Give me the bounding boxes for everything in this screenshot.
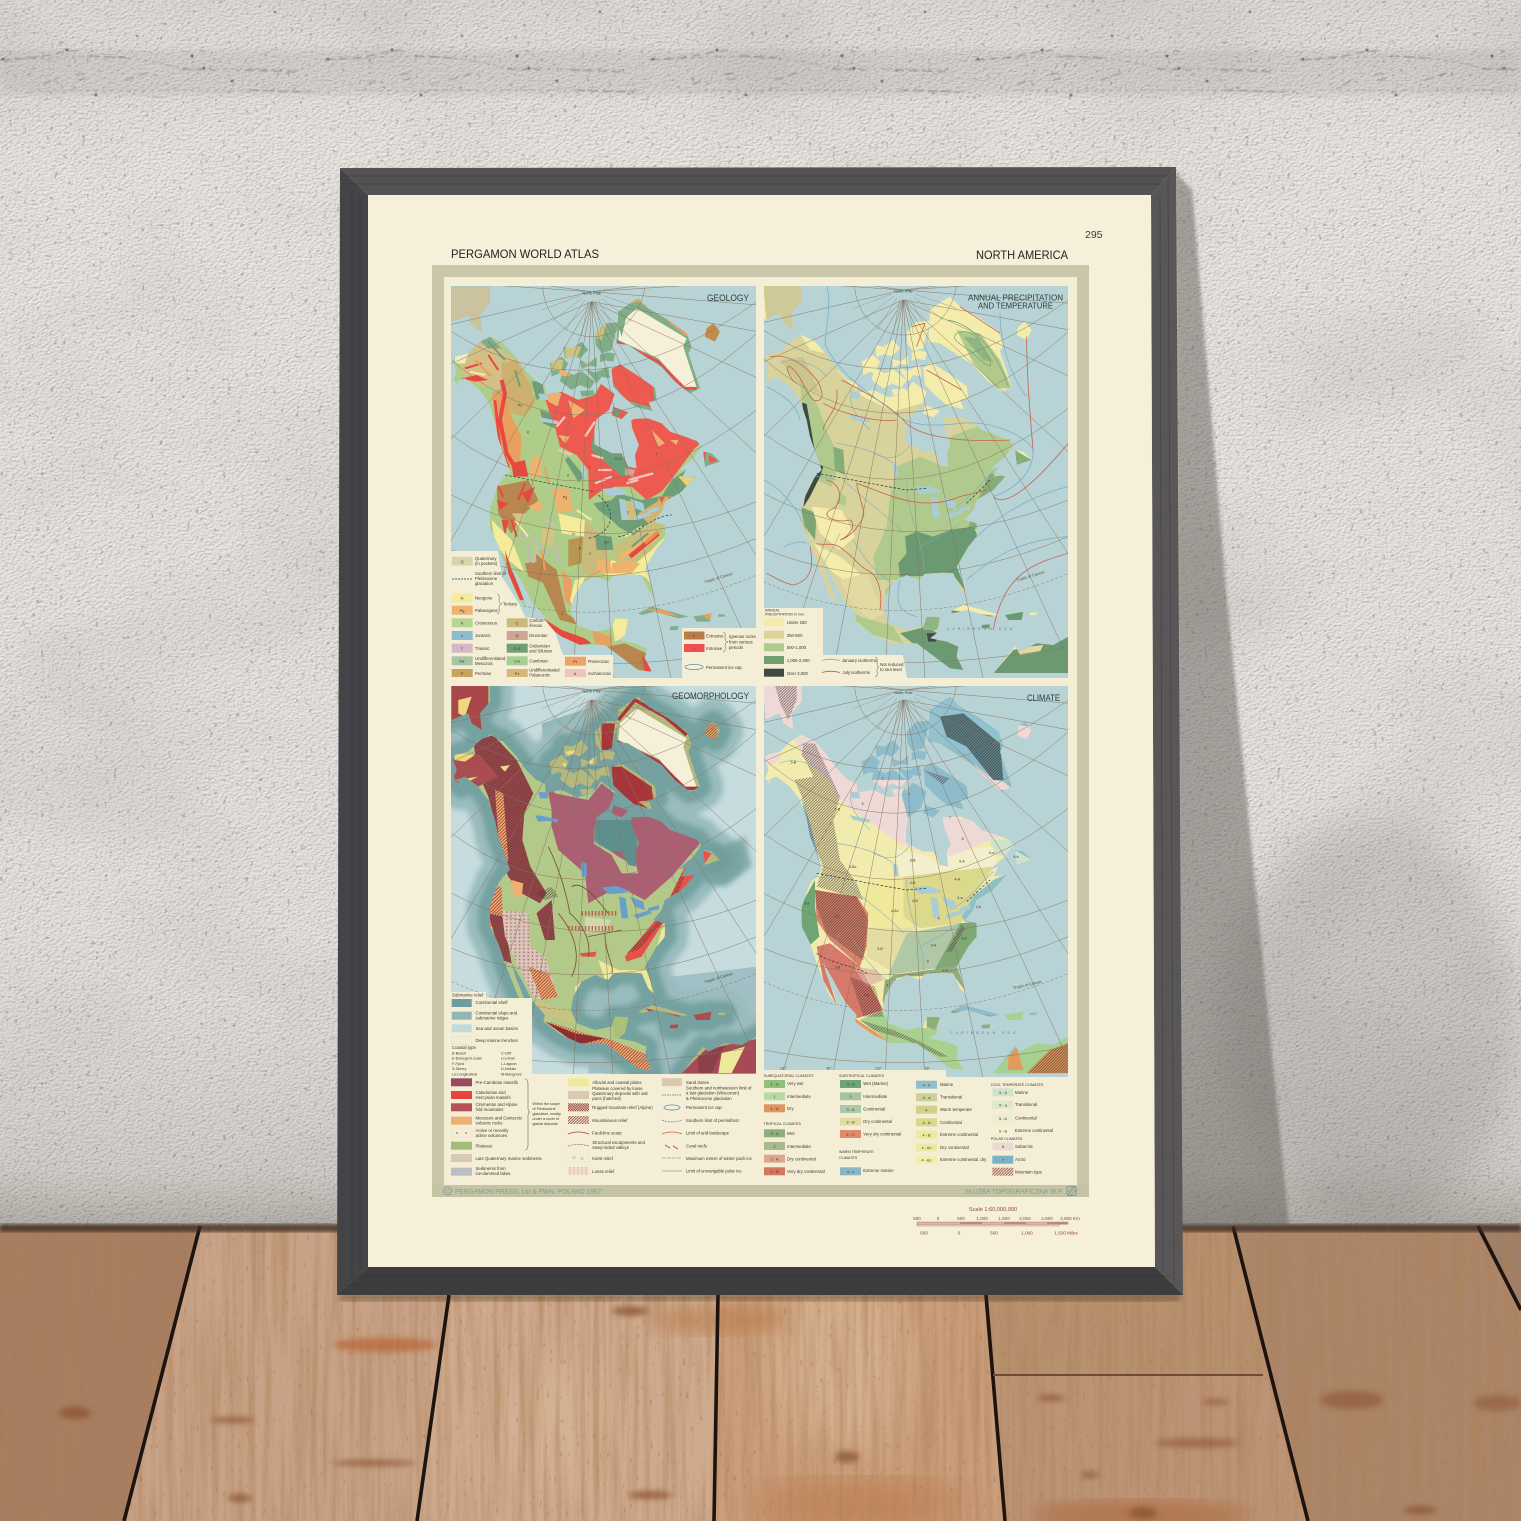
legend: precipitation: PRECIPITATION in mm. xyxy=(765,612,805,616)
legend: climate: Extreme continental, dry xyxy=(940,1157,987,1162)
map labels: Pg xyxy=(563,495,567,499)
scale bar: 2,500 xyxy=(1041,1216,1053,1221)
climate map labels: 2-A xyxy=(864,993,870,997)
scale bar: 2,000 xyxy=(1019,1216,1031,1221)
legend: geology: Undifferentiated xyxy=(475,656,506,661)
legend: geomorphology: Quaternary deposits with salt xyxy=(592,1091,649,1096)
climate map labels: 7 xyxy=(882,776,884,780)
climate map labels: 5-B xyxy=(790,760,797,764)
panel: geomorphology map xyxy=(448,683,760,1080)
legend: geomorphology: Southern limit of permafrost xyxy=(686,1118,740,1123)
legend: geomorphology: under a cover of xyxy=(532,1117,560,1121)
climate map labels: 7 xyxy=(949,816,951,820)
legend: geology: Southern limit of xyxy=(475,571,507,576)
legend: climate xyxy=(764,1070,1068,1185)
legend: geomorphology: glacial deposits xyxy=(532,1122,558,1126)
panel: geomorphology map: North Pole xyxy=(582,689,602,694)
legend: geomorphology: Continental slope and xyxy=(476,1010,518,1016)
legend: geomorphology: Cimmerian and Alpine xyxy=(476,1102,518,1107)
legend: climate: 3 - B xyxy=(846,1120,855,1124)
heading: atlas title: PERGAMON WORLD ATLAS xyxy=(451,247,599,261)
legend: climate: Continental xyxy=(1015,1116,1037,1120)
legend: geomorphology: submarine ridges xyxy=(476,1016,508,1020)
legend: geomorphology: Hercynian massifs xyxy=(476,1095,511,1100)
isotherm lines xyxy=(763,285,1068,630)
legend: climate: SUBTROPICAL CLIMATES xyxy=(839,1074,885,1078)
legend: geology: Undifferentiated xyxy=(529,668,560,672)
legend: geology: Permian xyxy=(475,671,492,676)
legend: geology: Quaternary xyxy=(475,556,497,561)
map labels: P xyxy=(579,547,582,551)
climate map labels: North Pole xyxy=(894,690,914,695)
panel: climate map: 120° xyxy=(780,1066,788,1070)
heading: annual precipitation and temperature: ANNUAL PRECIPITATION xyxy=(968,294,1063,302)
climate map labels xyxy=(790,690,1019,997)
legend: precipitation: to sea level xyxy=(880,667,902,672)
legend: geology: P xyxy=(461,671,464,676)
legend: climate: 3 - A xyxy=(846,1107,855,1112)
legend: geology: I xyxy=(693,646,695,651)
legend: geology: Permanent ice cap xyxy=(706,665,742,670)
legend: geomorphology: Alluvial and coastal plains xyxy=(592,1080,642,1085)
scale bar: 1,000 xyxy=(1021,1230,1033,1236)
legend: climate: Continental xyxy=(940,1120,962,1125)
legend: geology: Jurassic xyxy=(475,633,492,638)
map labels xyxy=(518,290,657,616)
heading: annual precipitation and temperature: AND TEMPERATURE xyxy=(978,302,1053,310)
scale bar: 0 xyxy=(958,1230,961,1236)
heading: geology: GEOLOGY xyxy=(707,293,749,303)
climate map labels: 3-a xyxy=(804,902,810,906)
legend: climate: 5 - A xyxy=(999,1116,1007,1121)
legend: climate: 1 - a xyxy=(771,1082,779,1086)
legend: geomorphology: Lo-Longitudinal xyxy=(452,1072,477,1076)
legend: climate: Dry continental xyxy=(940,1145,969,1150)
legend: climate: Extreme continental xyxy=(940,1132,978,1137)
picture frame xyxy=(337,167,1183,1295)
legend: geology: glaciation xyxy=(475,581,494,586)
panel: annual precipitation and temperature map xyxy=(760,283,1070,680)
legend: geomorphology: volcanic rocks xyxy=(476,1120,502,1126)
legend: geology: Carbon- xyxy=(529,618,545,623)
climate map labels: 4-B xyxy=(910,881,916,885)
legend: geomorphology: & Pleistocene glaciation xyxy=(686,1096,732,1101)
legend: climate: 4 - b xyxy=(923,1082,930,1088)
heading: annual precipitation and temperature xyxy=(968,294,1063,310)
legend: geology: T xyxy=(461,646,464,651)
legend: geomorphology: Plateaus xyxy=(476,1144,492,1148)
legend: climate: COOL TEMPERATE CLIMATES xyxy=(991,1083,1044,1087)
legend: geomorphology: D-Deltaic xyxy=(501,1067,516,1071)
scale bar: 500 xyxy=(920,1230,928,1236)
climate map labels: 4-b xyxy=(976,905,981,909)
legend: climate: 5 - B xyxy=(999,1128,1008,1134)
legend: geomorphology: pans (hatched) xyxy=(592,1096,622,1101)
legend: geomorphology: Mesozoic and Cainozoic xyxy=(476,1116,523,1120)
legend: geomorphology: L-Lagoon xyxy=(501,1062,517,1066)
heading: climate: CLIMATE xyxy=(1027,693,1060,703)
climate map labels: 2-B xyxy=(834,966,841,970)
legend: geomorphology: E-Emergent coast xyxy=(452,1056,482,1060)
scale bar: 1,500 Miles xyxy=(1054,1230,1078,1236)
legend: climate: 4 - Bc xyxy=(921,1158,932,1162)
legend: geomorphology: Active or recently xyxy=(476,1128,509,1133)
legend: geomorphology: Limit of unnavigable polar ice xyxy=(686,1168,742,1174)
legend: geology: Cretaceous xyxy=(475,620,497,626)
heading: region title: NORTH AMERICA xyxy=(976,248,1068,262)
panel: climate map: CARIBBEAN SEA xyxy=(950,1031,1018,1035)
legend: geomorphology: F-Fjord xyxy=(452,1062,464,1066)
frame shadow on wall xyxy=(1175,172,1289,1226)
legend: climate: Warm temperate xyxy=(940,1107,972,1112)
climate map labels: 4-a xyxy=(957,896,964,900)
map labels: K xyxy=(567,474,570,478)
legend: geomorphology: Maximum extent of winter pack ice xyxy=(686,1156,753,1161)
map labels: O-S xyxy=(615,457,622,461)
legend: climate: 3 xyxy=(849,1094,852,1099)
legend: geology: Igneous rocks xyxy=(729,634,756,639)
legend: climate: 7 xyxy=(1002,1158,1004,1162)
legend: geomorphology: glaciation, mostly xyxy=(532,1112,561,1116)
legend: climate: 2 - a xyxy=(771,1131,779,1136)
legend: geology xyxy=(451,551,756,678)
legend: geomorphology: Coastal type xyxy=(452,1045,476,1050)
legend: geomorphology: Coral reefs xyxy=(686,1144,707,1148)
heading: geomorphology: GEOMORPHOLOGY xyxy=(672,691,749,701)
legend: geomorphology: Rugged mountain relief (Alpine) xyxy=(592,1105,653,1110)
wooden floor xyxy=(0,1224,1521,1521)
legend: geomorphology: Karst relief xyxy=(592,1156,614,1161)
legend: climate: SUBEQUATORIAL CLIMATES xyxy=(764,1074,814,1078)
legend: geomorphology: B-Beach xyxy=(452,1052,466,1056)
legend: geology: Extrusive xyxy=(706,634,724,638)
scale bar: 500 xyxy=(957,1216,965,1221)
legend: climate: Very dry continental xyxy=(787,1169,825,1174)
legend: geology: Mesozoic xyxy=(475,661,494,666)
legend: geomorphology: Caledonian and xyxy=(476,1090,506,1095)
legend: climate: 4 - A xyxy=(922,1120,931,1125)
panel: annual precipitation and temperature map: CARIBBEAN SEA xyxy=(947,627,1015,631)
legend: climate: 3 - C xyxy=(846,1132,855,1137)
legend: geomorphology: S-Skerry xyxy=(452,1067,466,1071)
panel: climate map: 100° xyxy=(875,1066,883,1070)
legend: climate: 4 - a xyxy=(923,1095,931,1100)
map labels: Pz xyxy=(518,404,522,408)
legend: geomorphology: Submarine relief xyxy=(452,992,484,998)
legend: geomorphology: Late Quaternary marine sediments xyxy=(476,1156,542,1161)
climate map labels: 4-A xyxy=(954,878,961,882)
legend: climate: Transitional xyxy=(1015,1102,1037,1107)
panel: geology map xyxy=(448,285,758,682)
scale bar: 500 xyxy=(913,1216,921,1221)
map labels: North Pole xyxy=(582,290,602,295)
climate map labels: 5-A xyxy=(959,860,965,864)
climate map labels: 4 xyxy=(938,916,940,920)
legend: climate: Arctic xyxy=(1015,1157,1027,1162)
legend: geology: Pg xyxy=(460,608,464,613)
legend: climate: Extreme continental xyxy=(1015,1128,1053,1133)
page number: 295 xyxy=(1085,229,1103,241)
cartographer credit with icon: SŁUŻBA TOPOGRAFICZNA W.P. xyxy=(965,1186,1063,1196)
legend: geology: O-S xyxy=(514,646,521,651)
legend: geology: K xyxy=(461,620,464,626)
legend: geomorphology: M-Mangrove xyxy=(501,1072,522,1076)
panel: geomorphology map: Tropic of Cancer xyxy=(704,971,734,984)
legend: geology: A xyxy=(574,671,577,676)
legend: climate: Extreme marine xyxy=(863,1168,894,1173)
map labels: C xyxy=(627,510,630,514)
legend: geology: Cambrian xyxy=(529,658,549,664)
climate map labels: 5-B xyxy=(834,808,841,812)
map labels: Cm xyxy=(604,540,609,544)
panel: climate map: Tropic of Cancer xyxy=(1012,979,1043,990)
legend: geomorphology: Li-Liman xyxy=(501,1056,515,1060)
legend: geomorphology: Deep marine trenches xyxy=(476,1038,518,1043)
legend: geology: Pleistocene xyxy=(475,576,498,581)
legend: geomorphology: Mountainous relief xyxy=(592,1118,628,1123)
legend: climate: 2 - A xyxy=(770,1156,779,1162)
scale bar: Scale 1:60,000,000 xyxy=(969,1207,1017,1213)
legend: climate: 2 - B xyxy=(770,1169,779,1174)
legend: climate: CLIMATES xyxy=(839,1156,858,1160)
legend: precipitation: ANNUAL xyxy=(765,608,780,612)
legend: geomorphology: ice-dammed lakes xyxy=(476,1171,510,1176)
climate map labels: 3-a xyxy=(961,936,968,940)
legend: precipitation: 500-1,000 xyxy=(787,645,807,650)
scale bar: 500 xyxy=(990,1230,998,1236)
climate map labels: 3-C xyxy=(834,914,841,918)
legend: climate: Marine xyxy=(940,1082,954,1087)
legend: geomorphology: Permanent ice cap xyxy=(686,1105,722,1110)
legend: geomorphology: Southern and northwestern limit of xyxy=(686,1086,752,1090)
legend: climate: 4 xyxy=(925,1108,928,1112)
panel: climate map xyxy=(760,683,1070,1080)
legend: climate: 6 xyxy=(1002,1144,1004,1149)
scale bar: 1,000 xyxy=(976,1216,988,1221)
climate map labels: 6 xyxy=(862,802,864,806)
scale bar: 0 xyxy=(937,1216,940,1221)
legend: precipitation: July isotherms xyxy=(842,670,870,675)
map labels: J xyxy=(561,612,563,616)
legend: precipitation: January isotherms xyxy=(842,658,877,663)
climate map labels: 4-Bc xyxy=(849,865,857,869)
legend: climate: 5 - b xyxy=(999,1090,1007,1095)
panel: geology map: Tropic of Cancer xyxy=(704,571,734,584)
legend: geomorphology: Sea and ocean basins xyxy=(476,1026,518,1031)
climate map labels: 2 xyxy=(886,984,888,988)
legend: climate: Very wet xyxy=(787,1081,804,1086)
legend: geomorphology: Fault-line scarp xyxy=(592,1130,622,1136)
climate map labels: 6 xyxy=(962,837,964,841)
legend: geology: Y xyxy=(693,634,696,638)
legend: climate: Continental xyxy=(863,1106,885,1112)
legend: geology: Palaeozoic xyxy=(529,672,551,678)
climate map labels: 2-a xyxy=(943,968,949,972)
legend: precipitation: Under 250 xyxy=(787,620,807,625)
legend: geology: Mz xyxy=(459,658,465,664)
panel: climate map: 80° xyxy=(827,1066,832,1070)
scale bar: 1,500 xyxy=(998,1216,1010,1221)
floor knots xyxy=(59,1306,1521,1519)
legend: climate: TROPICAL CLIMATES xyxy=(764,1122,802,1126)
publisher credit: PERGAMON PRESS, Ltd & PWN, POLAND 1967 xyxy=(455,1188,602,1196)
panel: annual precipitation and temperature map: Tropic of Cancer xyxy=(1015,569,1046,583)
legend: geology: Palaeogene xyxy=(475,608,499,613)
legend: geology: Neogene xyxy=(475,596,493,600)
legend: geomorphology: Sediments from xyxy=(476,1166,506,1171)
legend: climate: Dry continental xyxy=(863,1119,892,1124)
legend: climate: 4 - c xyxy=(847,1169,854,1174)
map labels: I xyxy=(656,452,657,456)
panel: climate map: 90° xyxy=(925,1066,931,1070)
legend: geomorphology: Pre-Cambrian massifs xyxy=(476,1080,518,1085)
legend: climate: 4 - B xyxy=(922,1132,931,1138)
legend: climate: Marine xyxy=(1015,1090,1029,1095)
legend: geology: J xyxy=(461,633,463,638)
legend: geology: Devonian xyxy=(529,633,548,638)
legend: geomorphology: Limit of arid landscape xyxy=(686,1130,730,1136)
climate map labels: 5-a xyxy=(989,851,995,855)
legend: geomorphology: a last glaciation (Wisconsin) xyxy=(686,1090,740,1096)
legend: geology: Q xyxy=(460,559,464,564)
legend: climate: 5 - a xyxy=(999,1102,1008,1108)
cartographer credit with icon xyxy=(965,1186,1076,1196)
legend: geomorphology: Plateaus covered by loose xyxy=(592,1086,643,1091)
legend: precipitation xyxy=(764,608,907,678)
legend: geology: Cm xyxy=(514,658,520,664)
legend: climate: POLAR CLIMATES xyxy=(991,1137,1023,1141)
legend: geology: Triassic xyxy=(475,646,490,651)
legend: geomorphology: C-Cliff xyxy=(501,1052,512,1056)
climate map labels: 5-B xyxy=(910,859,916,863)
legend: climate: 3 - a xyxy=(847,1082,855,1086)
legend: geology: Archaeozoic xyxy=(588,671,612,676)
legend: climate: Dry continental xyxy=(787,1156,816,1162)
legend: geomorphology: Structural escarpments and xyxy=(592,1140,645,1145)
legend: geomorphology: Within the scope xyxy=(532,1102,560,1106)
legend: geomorphology xyxy=(451,992,756,1185)
legend: geology: Pz xyxy=(515,671,519,676)
legend: geology: Pt xyxy=(573,659,578,664)
legend: precipitation: Over 2,000 xyxy=(787,671,809,676)
legend: geology: iferous xyxy=(529,623,542,628)
legend: geomorphology: steep-sided valleys xyxy=(592,1145,629,1150)
panel: annual precipitation and temperature map: North Pole xyxy=(894,289,914,294)
legend: geology: and Silurian xyxy=(529,648,553,654)
legend: climate: Dry xyxy=(787,1106,795,1111)
legend: climate: Subarctic xyxy=(1015,1144,1034,1149)
legend: geology: C xyxy=(516,620,519,626)
legend: climate: Intermediate xyxy=(787,1144,811,1149)
legend: geology: Intrusive xyxy=(706,646,723,651)
legend: precipitation: Not reduced xyxy=(880,662,904,667)
legend: climate: Mountain type xyxy=(1015,1170,1043,1174)
climate map labels: 3 xyxy=(927,960,929,964)
legend: climate: 2 xyxy=(773,1144,776,1149)
legend: geomorphology: active volcanoes xyxy=(476,1133,507,1138)
legend: climate: WARM TEMPERATE xyxy=(839,1150,874,1154)
legend: geology: Tertiary xyxy=(503,602,518,606)
legend: geology: Ordovician xyxy=(529,644,550,648)
legend: geology: periods xyxy=(729,645,743,650)
atlas sheet border xyxy=(432,265,1089,1197)
legend: precipitation: 250-500 xyxy=(787,633,803,638)
scale bar: 3,000 Km xyxy=(1060,1216,1080,1221)
climate map labels: 3-B xyxy=(877,947,883,951)
map labels: C xyxy=(589,552,592,556)
climate map labels: 4-Ac xyxy=(891,909,899,913)
climate map labels: 4-B xyxy=(912,899,918,903)
legend: geomorphology: Continental shelf xyxy=(476,1000,508,1005)
legend: geology: (in pockets) xyxy=(475,561,498,566)
legend: geology: Proterozoic xyxy=(588,659,610,664)
legend: precipitation: 1,000-2,000 xyxy=(787,658,810,663)
legend: climate: Transitional xyxy=(940,1094,962,1100)
poster paper xyxy=(368,195,1155,1267)
legend: climate: Very dry continental xyxy=(863,1132,901,1136)
legend: climate: Intermediate xyxy=(787,1094,811,1099)
publisher credit: C xyxy=(446,1189,450,1195)
climate map labels: 3-A xyxy=(930,944,937,948)
legend: geomorphology: of Pleistocene xyxy=(532,1107,556,1111)
climate map labels: 5-b xyxy=(1013,855,1019,859)
map labels: N xyxy=(572,532,575,536)
scale bar xyxy=(913,1207,1080,1236)
legend: climate: Wet (Marine) xyxy=(863,1081,889,1086)
legend: geomorphology: fold mountains xyxy=(476,1107,503,1112)
legend: geology: N xyxy=(461,596,464,600)
map labels: K xyxy=(527,430,530,434)
legend: geomorphology: Loess relief xyxy=(592,1169,615,1174)
legend: climate: Wet xyxy=(787,1131,795,1136)
legend: climate: 1 xyxy=(773,1094,776,1099)
legend: geology: from various xyxy=(729,640,753,644)
legend: geomorphology: Sand dunes xyxy=(686,1080,709,1085)
map labels: I xyxy=(589,465,590,469)
legend: geology: D xyxy=(516,633,519,638)
legend: climate: 4 - Ac xyxy=(922,1145,932,1150)
legend: climate: 1 - A xyxy=(770,1106,779,1111)
legend: climate: Intermediate xyxy=(863,1094,888,1099)
climate map labels: 7 xyxy=(908,792,910,796)
